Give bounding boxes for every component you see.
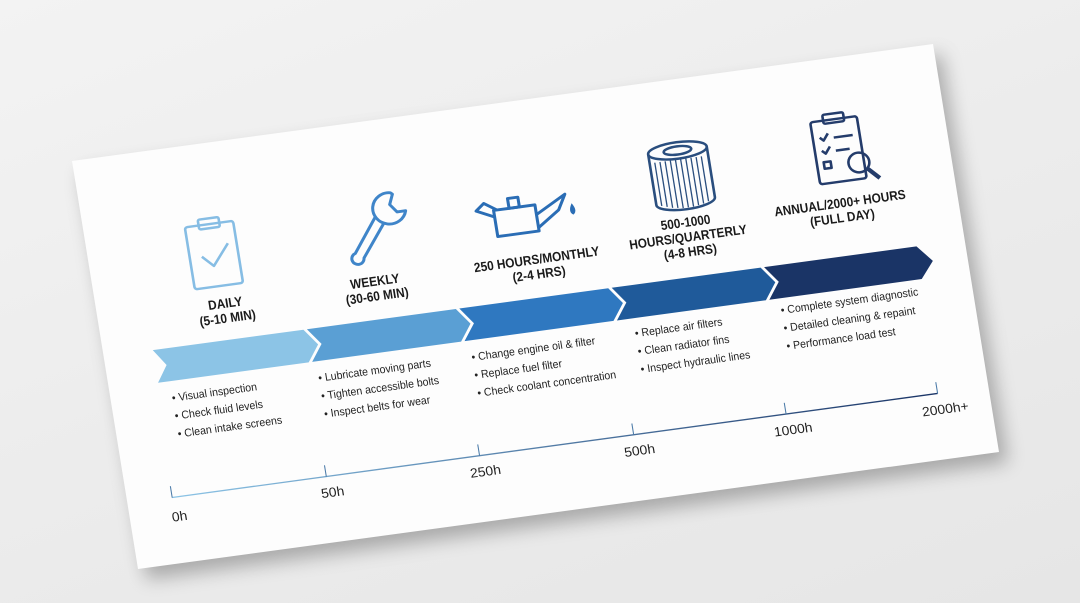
axis labels: 0h: [171, 509, 188, 525]
bullets: weekly: • Inspect belts for wear: [323, 394, 431, 420]
heading: weekly: (30-60 MIN): [345, 286, 410, 308]
bullets: daily: • Visual inspection: [171, 380, 258, 404]
card: 500h: [623, 442, 656, 460]
heading: daily: DAILY: [207, 295, 244, 313]
icon: wrench: [350, 191, 408, 266]
bullets: weekly: • Tighten accessible bolts: [320, 374, 440, 402]
bullets: annual: • Performance load test: [786, 325, 896, 352]
heading: weekly: WEEKLY: [349, 272, 401, 292]
heading: 250 hours: (2-4 HRS): [512, 264, 567, 285]
heading: 500-1000: HOURS/QUARTERLY: [628, 223, 748, 253]
icon: clipboard check: [184, 216, 244, 290]
bullets: 250 hours: • Replace fuel filter: [473, 357, 563, 381]
bullets: 500-1000: • Inspect hydraulic lines: [640, 348, 751, 375]
icon: clipboard with magnifier: [809, 111, 882, 186]
bullets: daily: • Clean intake screens: [177, 414, 283, 440]
heading: daily: (5-10 MIN): [199, 308, 257, 329]
card: 1000h: [773, 421, 814, 440]
timeline axis: [170, 382, 938, 498]
bullets: annual: [780, 285, 919, 352]
bullets: daily: • Check fluid levels: [174, 398, 264, 422]
chevron band: [152, 246, 933, 383]
card: 50h: [320, 484, 345, 501]
heading: annual: (FULL DAY): [809, 207, 876, 230]
heading: annual: ANNUAL/2000+ HOURS: [773, 188, 907, 220]
bullets: daily: [171, 380, 283, 440]
heading: weekly: [345, 272, 410, 308]
bullets: 250 hours: • Check coolant concentration: [476, 368, 617, 399]
heading: 250 hours: 250 HOURS/MONTHLY: [473, 245, 600, 275]
heading: 500-1000: (4-8 HRS): [663, 242, 718, 263]
bullets: annual: • Complete system diagnostic: [780, 285, 919, 316]
bullets: 500-1000: • Clean radiator fins: [637, 333, 730, 358]
heading: 500-1000: [628, 213, 748, 263]
heading: daily: [199, 295, 257, 329]
icon: oil can: [474, 192, 576, 238]
bullets: 500-1000: [634, 315, 751, 375]
icon: air filter: [646, 140, 716, 212]
heading: 500-1000: 500-1000: [660, 213, 712, 233]
card: 250h: [469, 463, 502, 481]
card: 2000h+: [921, 400, 970, 420]
bullets: weekly: [317, 357, 440, 420]
bullets: annual: • Detailed cleaning & repaint: [783, 304, 916, 334]
bullets: 500-1000: • Replace air filters: [634, 315, 723, 340]
card: [72, 44, 999, 569]
bullets: 250 hours: • Change engine oil & filter: [471, 334, 596, 363]
bullets: 250 hours: [471, 334, 617, 399]
bullets: weekly: • Lubricate moving parts: [317, 357, 432, 384]
